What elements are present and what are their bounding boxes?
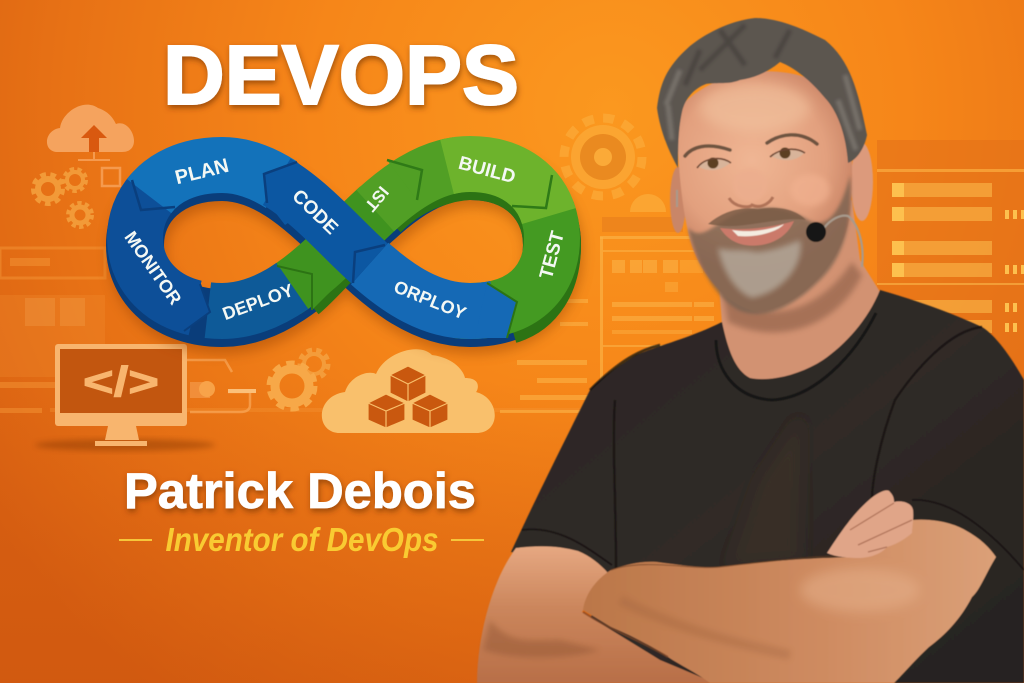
icon: upload cloud (47, 105, 134, 186)
segment: DEPLOY (135, 164, 552, 331)
cheek highlights (790, 174, 830, 206)
moustache (708, 208, 806, 226)
forehead highlight (700, 84, 810, 132)
hair (657, 18, 867, 168)
left arm shading (483, 620, 600, 658)
icon: monitor with code tag: </> (83, 358, 159, 405)
segment: MONITOR: MONITOR (121, 228, 185, 308)
faded server rack right (877, 140, 1024, 400)
icon: small gears left (35, 170, 91, 226)
faded server rack centre right (500, 217, 722, 413)
segment: lower green crossing (135, 164, 552, 311)
headset microphone (677, 190, 863, 267)
segment: DEPLOY: DEPLOY (220, 280, 296, 324)
name: Patrick Debois (124, 463, 476, 519)
title: DEVOPS (163, 28, 519, 122)
icon: monitor with code tag (35, 344, 215, 451)
icon: large faded gear (564, 118, 666, 212)
icon: cloud with cubes (322, 349, 495, 433)
shirt collar (716, 313, 876, 400)
segment: BUILD (135, 153, 552, 311)
loop depth (135, 171, 552, 318)
grey chin (718, 240, 801, 298)
ears (851, 143, 873, 221)
left arm (477, 546, 715, 683)
infinity loop (121, 153, 569, 338)
shirt (511, 290, 1024, 683)
eyes (697, 148, 805, 170)
segment: MONITOR (121, 164, 552, 311)
segment: PLAN: PLAN (173, 155, 231, 189)
segment: IST: IST (360, 182, 392, 215)
hand (827, 490, 913, 558)
face (678, 71, 852, 312)
loop shadow (137, 178, 554, 325)
forearm (583, 520, 996, 683)
portrait (477, 18, 1024, 683)
forearm highlight (800, 568, 920, 612)
eyebrows (685, 135, 817, 156)
segment: TEST (135, 164, 569, 311)
segment: BUILD: BUILD (456, 153, 518, 188)
nose (729, 168, 773, 207)
faded server rack left (0, 248, 610, 413)
segment: CODE (135, 162, 552, 311)
fabric highlight (730, 420, 800, 565)
segment: ORPLOY: ORPLOY (391, 276, 469, 324)
neck stubble shadow (722, 262, 862, 332)
subtitle with rules: Inventor of DevOps (166, 521, 438, 558)
segment: ORPLOY (135, 164, 552, 338)
icon: circuit gears (186, 351, 327, 412)
segment: IST (135, 164, 552, 311)
segment: PLAN (132, 155, 552, 311)
neck (718, 200, 882, 385)
segment: TEST: TEST (536, 229, 569, 281)
sleeve folds (590, 327, 982, 570)
beard (688, 175, 851, 314)
segment: CODE: CODE (288, 186, 342, 239)
mouth (720, 221, 794, 246)
